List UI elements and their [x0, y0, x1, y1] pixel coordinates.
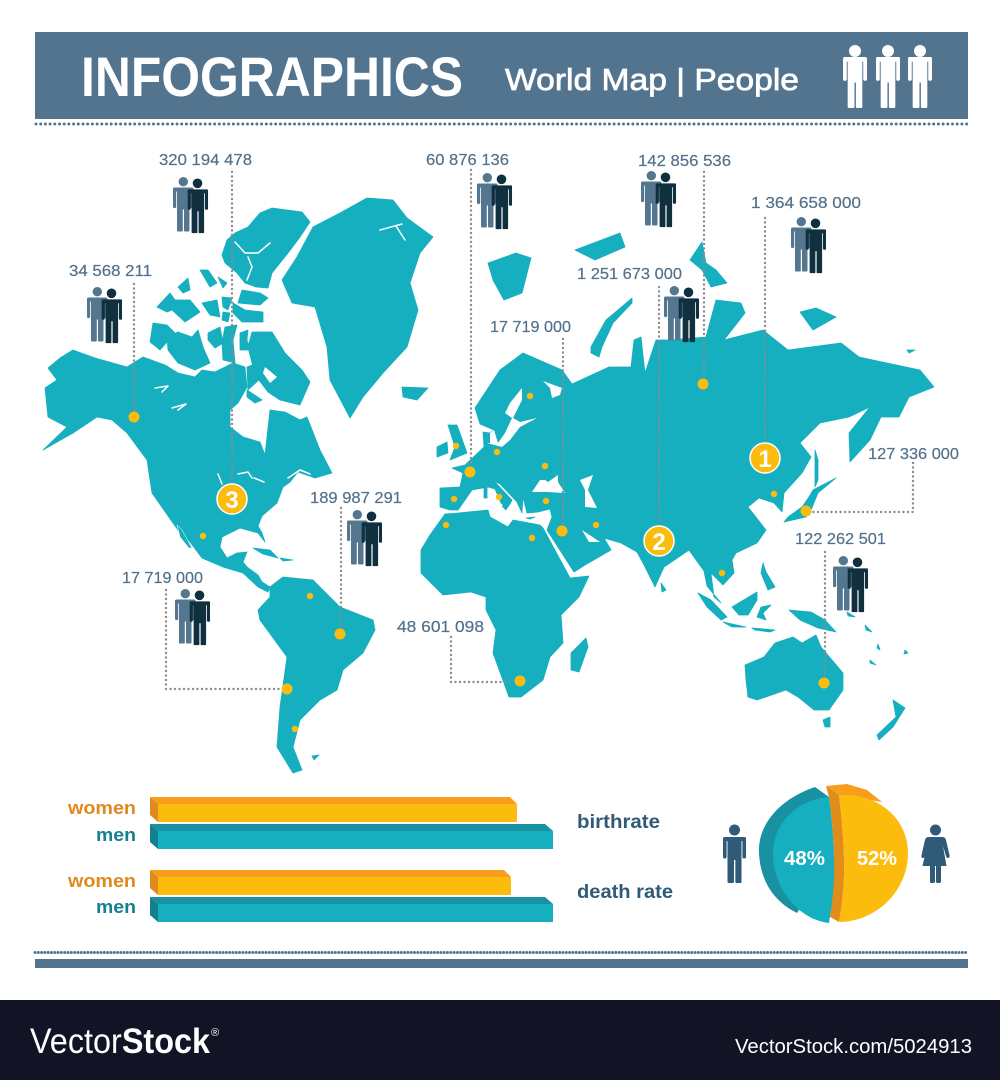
registered mark: ®	[211, 1027, 219, 1039]
islands: British Isles	[437, 425, 467, 460]
island: Baja California	[177, 525, 192, 548]
label: women: women	[67, 798, 136, 818]
label: women: women	[67, 871, 136, 891]
label: birthrate: birthrate	[577, 812, 660, 833]
continent: Australia	[745, 635, 843, 710]
header banner	[35, 32, 968, 119]
watermark logo: VectorStock	[30, 1022, 210, 1061]
Canadian Arctic islands	[150, 208, 310, 405]
icon: couple India	[664, 286, 699, 342]
icon: three people	[843, 45, 932, 108]
icon: couple UK	[477, 173, 512, 229]
icon: couple China	[791, 217, 826, 273]
label: men: men	[96, 897, 136, 917]
islands: Oceania and South East Asia	[661, 563, 908, 740]
Foxe Basin	[263, 367, 277, 383]
title: INFOGRAPHICS	[81, 45, 463, 108]
label: 34 568 211: 34 568 211	[69, 263, 152, 280]
bar: death rate women	[150, 870, 511, 895]
label: 1 364 658 000: 1 364 658 000	[751, 195, 861, 212]
continent: North America	[43, 350, 332, 592]
label: 127 336 000: 127 336 000	[868, 446, 959, 463]
world map	[43, 198, 934, 773]
label: 17 719 000 South America: 17 719 000	[122, 570, 203, 587]
continent: Africa	[421, 510, 589, 697]
Hudson and lake details	[155, 386, 310, 484]
label: 189 987 291: 189 987 291	[310, 490, 402, 507]
marker 2	[644, 526, 674, 556]
icon: couple USA	[173, 177, 208, 233]
Caribbean islands	[253, 548, 319, 760]
bar chart: birthrate and death rate	[67, 797, 673, 922]
icon: couple Canada	[87, 287, 122, 343]
marker 3	[217, 484, 247, 514]
island: Iceland	[402, 387, 428, 400]
location dots	[128, 378, 830, 732]
label: 48 601 098: 48 601 098	[397, 619, 484, 636]
marker 2: 2	[652, 529, 666, 556]
marker 1	[750, 443, 780, 473]
pie chart: gender split	[759, 784, 908, 923]
footer band	[0, 1000, 1000, 1080]
island: Madagascar	[571, 638, 588, 672]
label: 122 262 501: 122 262 501	[795, 531, 886, 548]
marker 3: 3	[225, 487, 239, 514]
icon: woman	[921, 824, 950, 883]
icon: man	[723, 824, 746, 883]
icon: couple Russia	[641, 171, 676, 227]
label: 320 194 478: 320 194 478	[159, 152, 252, 169]
Arctic Eurasian islands	[488, 233, 915, 357]
label: 52%: 52%	[857, 848, 897, 870]
bar: birthrate men	[150, 824, 553, 849]
label: men: men	[96, 825, 136, 845]
icon: couple Chile	[175, 589, 210, 645]
label: 1 251 673 000: 1 251 673 000	[577, 266, 682, 283]
continent: South America	[258, 577, 375, 773]
bar: birthrate women	[150, 797, 517, 822]
marker 1: 1	[758, 446, 772, 473]
island: Greenland	[282, 198, 433, 418]
label: 142 856 536: 142 856 536	[638, 153, 731, 170]
icon: couple Australia	[833, 556, 868, 612]
label: 60 876 136: 60 876 136	[426, 152, 509, 169]
icon: couple Brazil	[347, 510, 382, 566]
watermark url: VectorStock.com/5024913	[735, 1036, 972, 1058]
label: 48%: 48%	[784, 848, 825, 870]
bar: death rate men	[150, 897, 553, 922]
islands: Japan and Sakhalin	[784, 450, 836, 522]
seas cut into Eurasia	[487, 381, 600, 542]
subtitle: World Map | People	[505, 62, 799, 97]
label: 17 719 000 Europe: 17 719 000	[490, 319, 571, 336]
dotted leader lines	[134, 170, 913, 689]
Mediterranean islands	[484, 486, 535, 519]
continent: Eurasia	[440, 300, 934, 603]
population figures	[69, 152, 959, 636]
label: death rate: death rate	[577, 882, 673, 903]
